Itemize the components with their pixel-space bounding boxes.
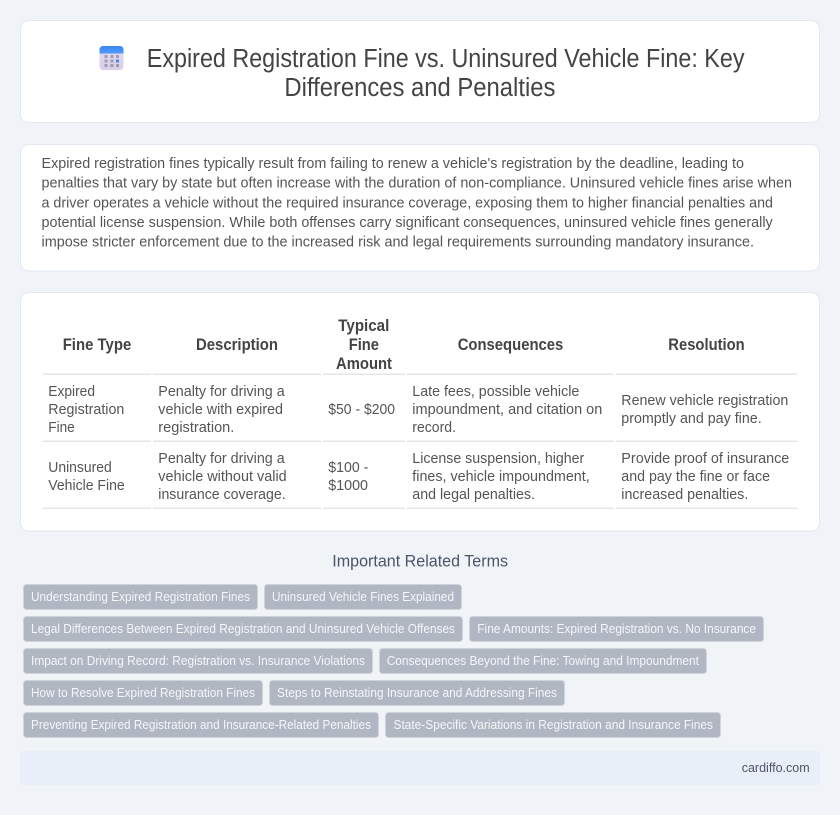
tag: Fine Amounts: Expired Registration vs. No Insurance	[477, 621, 756, 636]
title	[147, 45, 745, 102]
footer	[20, 751, 820, 785]
tag	[470, 616, 764, 642]
tag: Preventing Expired Registration and Insurance-Related Penalties	[31, 717, 371, 732]
tag	[24, 680, 262, 706]
tag: Uninsured Vehicle Fines Explained	[272, 589, 454, 604]
table row: uninsured vehicle fine: and legal penalties.	[412, 486, 535, 503]
text block: summary: impose stricter enforcement due to the increased risk and legal requirements surrounding mandatory insurance.	[42, 234, 754, 250]
table header row: Amount	[336, 355, 392, 373]
footer: cardiffo.com	[742, 761, 810, 775]
table row: expired registration fine: Penalty for driving a	[158, 383, 285, 400]
tag: State-Specific Variations in Registration and Insurance Fines	[394, 717, 713, 732]
table row: expired registration fine: record.	[412, 419, 456, 436]
table header row: Typical	[338, 317, 389, 335]
tag	[386, 712, 720, 738]
tag	[264, 584, 462, 610]
table row: expired registration fine	[48, 383, 788, 436]
related term tags	[24, 584, 764, 738]
table header row: Description	[196, 336, 278, 354]
tag	[380, 648, 706, 674]
panel: summary paragraph	[20, 144, 820, 271]
text block: summary: potential license suspension. While both offenses carry significant consequences, uninsured vehicle fines generally	[42, 214, 773, 231]
table row: expired registration fine: Fine	[48, 419, 75, 436]
table row: expired registration fine: Expired	[48, 383, 95, 400]
table header row: Resolution	[668, 336, 745, 354]
title: Differences and Penalties	[284, 74, 555, 102]
panel: comparison table	[20, 292, 820, 531]
table row: expired registration fine: Registration	[48, 401, 124, 418]
text block: summary	[42, 155, 792, 250]
title: Expired Registration Fine vs. Uninsured Vehicle Fine: Key	[147, 45, 745, 73]
tag: Steps to Reinstating Insurance and Addressing Fines	[277, 685, 557, 700]
tag	[24, 648, 372, 674]
table row: expired registration fine: Late fees, possible vehicle	[412, 383, 579, 400]
table row: uninsured vehicle fine: Provide proof of insurance	[621, 450, 789, 467]
table row: uninsured vehicle fine: increased penalties.	[621, 486, 748, 503]
table header row	[63, 317, 745, 373]
table header row: Fine	[349, 336, 379, 354]
tag: Legal Differences Between Expired Registration and Uninsured Vehicle Offenses	[31, 621, 455, 636]
table row: expired registration fine: $50 - $200	[328, 401, 395, 418]
tag	[24, 584, 258, 610]
icon: calendar	[100, 46, 124, 70]
table row: uninsured vehicle fine: License suspension, higher	[412, 450, 584, 467]
table row: uninsured vehicle fine: vehicle without valid	[158, 468, 287, 485]
text block: summary: a driver operates a vehicle without the required insurance coverage, exposing them to higher financial penalties and	[42, 194, 773, 212]
table row: expired registration fine: impoundment, and citation on	[412, 401, 602, 418]
table row: uninsured vehicle fine: Penalty for driving a	[158, 450, 285, 467]
table row: uninsured vehicle fine: Vehicle Fine	[48, 477, 125, 494]
table row: uninsured vehicle fine: and pay the fine or face	[621, 468, 770, 485]
tag: How to Resolve Expired Registration Fines	[31, 685, 255, 700]
tag: Impact on Driving Record: Registration vs. Insurance Violations	[31, 653, 365, 668]
table row: uninsured vehicle fine: $1000	[328, 477, 368, 494]
tag: Consequences Beyond the Fine: Towing and Impoundment	[387, 653, 699, 668]
table row: expired registration fine: registration.	[158, 419, 234, 436]
table header row: Consequences	[458, 336, 563, 354]
tag: Understanding Expired Registration Fines	[31, 589, 250, 604]
header panel	[20, 20, 820, 122]
table row: uninsured vehicle fine: insurance coverage.	[158, 486, 286, 503]
table header row: Fine Type	[63, 336, 131, 354]
heading: important related terms: Important Related Terms	[332, 552, 508, 570]
tag	[24, 616, 462, 642]
tag	[24, 712, 378, 738]
table row: expired registration fine: vehicle with expired	[158, 401, 283, 418]
table row: uninsured vehicle fine: Uninsured	[48, 459, 112, 476]
table row: expired registration fine: Renew vehicle registration	[621, 392, 788, 409]
text block: summary: penalties that vary by state but often increase with the duration of non-compliance. Uninsured vehicle fines arise when	[42, 175, 792, 192]
table row: uninsured vehicle fine	[48, 450, 789, 503]
text block: summary: Expired registration fines typically result from failing to renew a vehicle's registration by the deadline, leading to	[42, 155, 744, 172]
tag	[270, 680, 564, 706]
table row: expired registration fine: promptly and pay fine.	[621, 410, 762, 427]
table row: uninsured vehicle fine: fines, vehicle impoundment,	[412, 468, 590, 485]
table row: uninsured vehicle fine: $100 -	[328, 459, 368, 476]
